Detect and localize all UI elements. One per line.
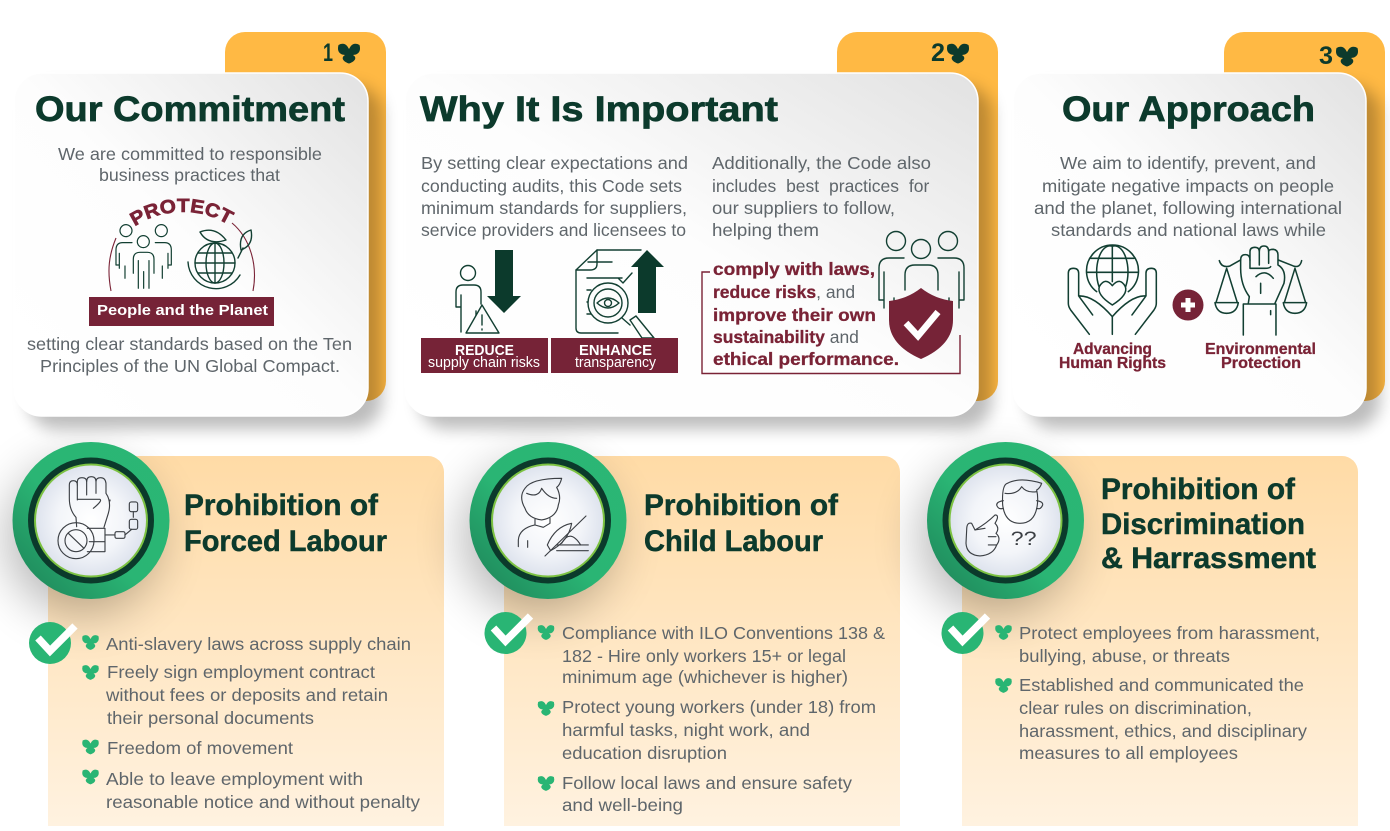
body text: and the planet, following international — [1034, 198, 1342, 218]
label banner: people and the planet — [89, 297, 274, 326]
badge: child labour — [470, 442, 626, 599]
heading: discrimination: & Harrassment — [1101, 542, 1316, 575]
heading: discrimination: Discrimination — [1101, 508, 1305, 541]
heading: child labour — [644, 489, 839, 558]
right column text: includes best practices for — [712, 176, 929, 196]
icon: pointing hand at person — [966, 480, 1043, 556]
heading: discrimination — [1101, 473, 1316, 575]
heading: forced labour: Prohibition of — [184, 489, 379, 522]
badge: forced labour — [12, 442, 170, 599]
closing text — [27, 334, 352, 376]
icon: plus — [1172, 290, 1204, 320]
icon: document magnifier with up arrow — [576, 250, 664, 338]
icon: protect people and planet: PROTECT — [129, 198, 235, 226]
list: child labour: and well-being — [562, 795, 683, 815]
label banner: people and the planet: People and the Planet — [97, 302, 268, 319]
left column text: conducting audits, this Code sets — [421, 176, 682, 196]
right column text — [712, 153, 931, 240]
badge number 1: 1 — [323, 39, 333, 67]
banner: enhance: transparency — [575, 355, 657, 371]
left column text — [421, 153, 688, 240]
icon: fist and scales — [1215, 246, 1307, 335]
heading: Why It Is Important — [420, 90, 778, 129]
list: discrimination — [995, 623, 1320, 763]
list: child labour: Follow local laws and ensure safety — [562, 773, 852, 793]
panel: child labour background — [504, 456, 900, 826]
list: forced labour: Anti-slavery laws across supply chain — [106, 634, 411, 654]
icon: hands with globe and heart — [1068, 245, 1156, 334]
label: advancing human rights: Advancing — [1073, 341, 1152, 358]
left column text: By setting clear expectations and — [421, 153, 688, 173]
label: environmental protection — [1205, 341, 1316, 372]
right column text: Additionally, the Code also — [712, 153, 931, 173]
label: advancing human rights: Human Rights — [1059, 355, 1166, 372]
panel: our commitment — [21, 32, 390, 438]
icon: check — [29, 622, 75, 664]
right column text: our suppliers to follow, — [712, 198, 895, 218]
list: forced labour — [82, 634, 420, 812]
banner: reduce: supply chain risks — [428, 355, 540, 371]
heading: child labour: Prohibition of — [644, 489, 839, 522]
left column text: minimum standards for suppliers, — [421, 198, 687, 218]
panel: discrimination background — [962, 456, 1358, 826]
list: discrimination: bullying, abuse, or threats — [1019, 646, 1230, 666]
heading: forced labour — [184, 489, 387, 558]
panel: our approach — [1013, 32, 1385, 429]
badge number 1 — [323, 39, 360, 67]
list: discrimination: clear rules on discrimination, — [1019, 698, 1252, 718]
icon: pointing hand at person: ?? — [1011, 529, 1037, 550]
list: child labour: harmful tasks, night work, and — [562, 720, 810, 740]
list: forced labour: Freedom of movement — [107, 738, 293, 758]
right column text: helping them — [712, 220, 819, 240]
icon: check — [484, 612, 530, 654]
body text: standards and national laws while — [1051, 220, 1326, 240]
banner: reduce — [421, 338, 548, 373]
icon: child and task — [518, 478, 588, 556]
badge number 2 — [931, 39, 969, 67]
panel: forced labour background — [48, 456, 444, 826]
body text: We aim to identify, prevent, and — [1060, 153, 1316, 173]
body text: mitigate negative impacts on people — [1042, 176, 1334, 196]
callout: commitments: reduce risks, and — [713, 282, 855, 302]
list: forced labour: without fees or deposits and retain — [105, 685, 388, 705]
badge shadows — [6, 462, 1072, 614]
body text — [1034, 153, 1342, 240]
icon: person with risk and down arrow — [456, 250, 521, 333]
badge: discrimination — [927, 442, 1084, 599]
label: advancing human rights — [1059, 341, 1166, 372]
list: discrimination: harassment, ethics, and disciplinary — [1019, 721, 1307, 741]
list: child labour: Compliance with ILO Conventions 138 & — [562, 623, 885, 643]
callout: commitments: ethical performance. — [713, 349, 899, 369]
icon: check — [942, 612, 988, 654]
list: forced labour: Able to leave employment with — [106, 769, 363, 789]
closing text: Principles of the UN Global Compact. — [40, 356, 340, 376]
heading: child labour: Child Labour — [644, 525, 823, 558]
intro text: business practices that — [99, 165, 280, 185]
banner: enhance: ENHANCE — [579, 342, 652, 359]
closing text: setting clear standards based on the Ten — [27, 334, 352, 354]
icon: people with shield — [879, 232, 964, 359]
list: child labour — [538, 623, 885, 815]
list: child labour: minimum age (whichever is higher) — [562, 667, 848, 687]
list: discrimination: Protect employees from harassment, — [1019, 623, 1320, 643]
label: environmental protection: Protection — [1221, 355, 1301, 372]
list: discrimination: Established and communicated the — [1019, 675, 1304, 695]
list: child labour: 182 - Hire only workers 15+ or legal — [562, 646, 846, 666]
heading: Our Commitment — [35, 90, 345, 129]
list: discrimination: measures to all employees — [1019, 743, 1238, 763]
list: forced labour: reasonable notice and without penalty — [106, 792, 420, 812]
list: child labour: education disruption — [562, 743, 727, 763]
heading: forced labour: Forced Labour — [184, 525, 387, 558]
icon: fist with chain — [58, 477, 138, 559]
badge number 3: 3 — [1319, 42, 1333, 70]
callout: commitments — [702, 259, 960, 374]
left column text: service providers and licensees to — [421, 220, 686, 240]
banner: reduce: REDUCE — [455, 342, 514, 359]
callout: commitments: comply with laws, — [713, 259, 875, 279]
label: environmental protection: Environmental — [1205, 341, 1316, 358]
intro text: We are committed to responsible — [58, 144, 322, 164]
badge number 2: 2 — [931, 39, 945, 67]
list: child labour: Protect young workers (under 18) from — [562, 697, 876, 717]
intro text — [58, 144, 322, 185]
list: forced labour: Freely sign employment contract — [107, 662, 375, 682]
heading: discrimination: Prohibition of — [1101, 473, 1296, 506]
callout: commitments: sustainability and — [713, 327, 859, 347]
callout: commitments: improve their own — [713, 305, 876, 325]
panel: why it is important — [405, 32, 998, 429]
list: forced labour: their personal documents — [107, 708, 314, 728]
badge number 3 — [1319, 42, 1358, 70]
heading: Our Approach — [1062, 90, 1315, 129]
icon: protect people and planet — [108, 198, 256, 292]
banner: enhance — [551, 338, 678, 373]
